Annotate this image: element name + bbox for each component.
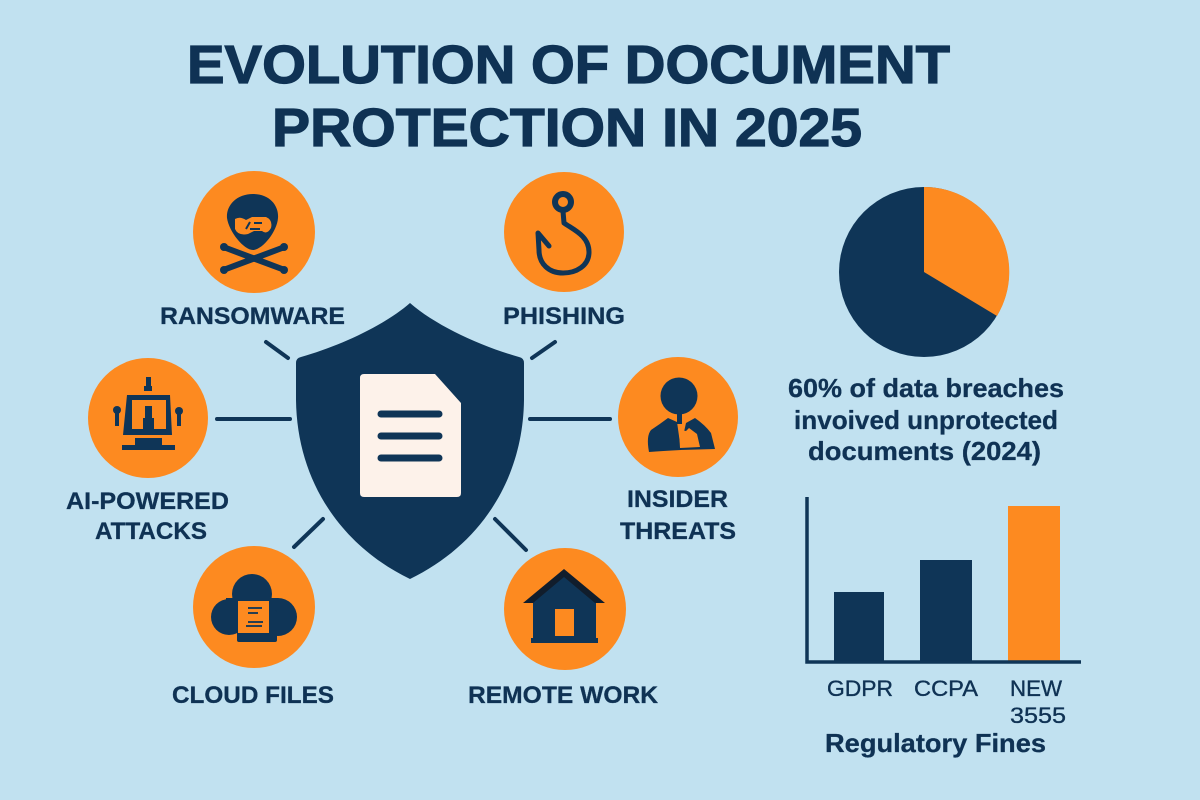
statistic text: documents (2024) bbox=[808, 436, 1041, 466]
icon: house bbox=[504, 548, 626, 670]
label: AI-powered attacks: AI-POWERED bbox=[66, 488, 229, 515]
pie chart bbox=[839, 187, 1009, 357]
threat: ransomware bbox=[160, 171, 345, 330]
central shield with document bbox=[296, 303, 524, 579]
icon: cloud with file bbox=[193, 546, 315, 668]
threat: cloud files bbox=[172, 546, 334, 709]
title: EVOLUTION OF DOCUMENT bbox=[187, 35, 950, 95]
threat: insider threats bbox=[618, 357, 738, 545]
connector lines from shield to threats bbox=[217, 342, 610, 550]
label: insider threats: INSIDER bbox=[627, 486, 728, 513]
threat: AI-powered attacks bbox=[66, 358, 229, 545]
chart title: Regulatory Fines bbox=[825, 728, 1046, 758]
title bbox=[187, 35, 950, 158]
threat: phishing bbox=[503, 172, 625, 330]
document icon bbox=[360, 374, 461, 497]
axis labels: CCPA bbox=[914, 676, 978, 701]
bar chart: regulatory fines bbox=[807, 497, 1081, 758]
threat: remote work bbox=[468, 548, 658, 709]
axis labels: GDPR bbox=[827, 676, 893, 701]
label: ransomware: RANSOMWARE bbox=[160, 303, 345, 330]
label: remote work: REMOTE WORK bbox=[468, 682, 658, 709]
icon: insider figure bbox=[618, 357, 738, 477]
label: AI-powered attacks: ATTACKS bbox=[95, 518, 207, 545]
statistic text: 60% of data breaches bbox=[788, 373, 1064, 403]
axis labels: 3555 bbox=[1010, 703, 1066, 728]
axis labels: NEW bbox=[1010, 676, 1062, 701]
bars bbox=[834, 506, 1060, 662]
title: PROTECTION IN 2025 bbox=[272, 98, 862, 158]
icon: fish hook bbox=[504, 172, 624, 292]
label: insider threats: THREATS bbox=[620, 518, 736, 545]
label: cloud files: CLOUD FILES bbox=[172, 682, 334, 709]
statistic text: invoived unprotected bbox=[794, 405, 1058, 435]
statistic text bbox=[788, 373, 1064, 466]
label: insider threats bbox=[620, 486, 736, 545]
icon: AI terminal bbox=[88, 358, 208, 478]
axes bbox=[807, 497, 1081, 662]
label: phishing: PHISHING bbox=[503, 303, 625, 330]
icon: skull and crossbones bbox=[193, 171, 315, 293]
shield bbox=[296, 303, 524, 579]
label: AI-powered attacks bbox=[66, 488, 229, 545]
axis labels bbox=[827, 676, 1066, 728]
